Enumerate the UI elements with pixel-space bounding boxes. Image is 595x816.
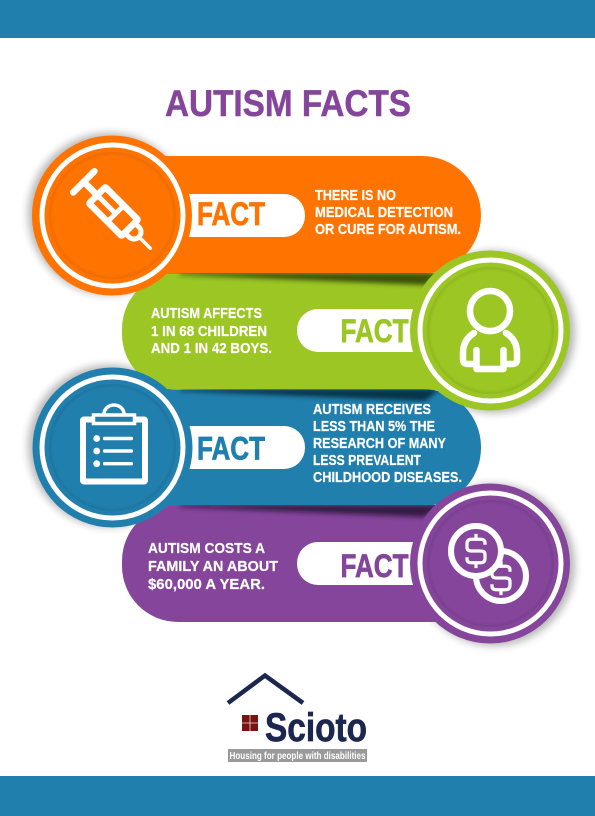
fact 2 text: AUTISM AFFECTS [151, 306, 262, 322]
fact 2 text [151, 306, 272, 357]
label: fact green: FACT [340, 313, 409, 349]
fact 2 text: AND 1 IN 42 BOYS. [151, 341, 272, 357]
top band [0, 0, 595, 38]
label: fact orange [150, 194, 305, 237]
fact 1 text: OR CURE FOR AUTISM. [315, 222, 461, 238]
logo wordmark: Scioto [265, 706, 367, 750]
label: fact blue [150, 426, 305, 469]
panel: blue pill [100, 389, 481, 506]
icon: clipboard [83, 405, 145, 482]
badge shadows [28, 133, 575, 646]
logo: Scioto [228, 676, 367, 762]
badge: orange syringe [32, 136, 192, 296]
logo roof [228, 676, 303, 703]
fact 4 text: AUTISM COSTS A [148, 541, 265, 557]
badge: purple coins [410, 484, 570, 644]
logo window [242, 715, 258, 731]
title: AUTISM FACTS [165, 83, 411, 124]
shadow: green pill on blue [180, 389, 440, 401]
fact 4 text: $60,000 A YEAR. [148, 577, 265, 593]
icon: person [463, 291, 517, 369]
fact 3 text: LESS THAN 5% THE [313, 419, 435, 435]
fact 2 text: 1 IN 68 CHILDREN [151, 324, 267, 340]
panel: purple pill [122, 505, 530, 622]
fact 3 text: CHILDHOOD DISEASES. [313, 470, 462, 486]
badge: blue clipboard [32, 368, 192, 528]
logo tagline: Housing for people with disabilities [230, 751, 366, 762]
shadow: blue pill on purple [180, 505, 440, 517]
fact 3 text [313, 402, 462, 486]
icon: syringe [73, 171, 161, 259]
label: fact purple: FACT [340, 548, 409, 584]
badge: green person [410, 250, 570, 410]
fact 1 text [315, 188, 461, 238]
label: fact purple [297, 542, 447, 585]
label: fact green [297, 309, 447, 352]
fact 1 text: MEDICAL DETECTION [315, 205, 453, 221]
panel: orange pill [100, 156, 481, 274]
shadow: orange pill on green [180, 273, 440, 285]
fact 4 text [148, 541, 278, 593]
fact 3 text: RESEARCH OF MANY [313, 436, 446, 452]
panel: green pill [122, 273, 530, 390]
label: fact blue: FACT [197, 430, 265, 466]
label: fact orange: FACT [197, 196, 265, 232]
fact 1 text: THERE IS NO [315, 188, 396, 204]
icon: coins [451, 526, 526, 601]
fact 3 text: LESS PREVALENT [313, 453, 421, 469]
fact 4 text: FAMILY AN ABOUT [148, 559, 278, 575]
bottom band [0, 776, 595, 816]
fact 3 text: AUTISM RECEIVES [313, 402, 431, 418]
